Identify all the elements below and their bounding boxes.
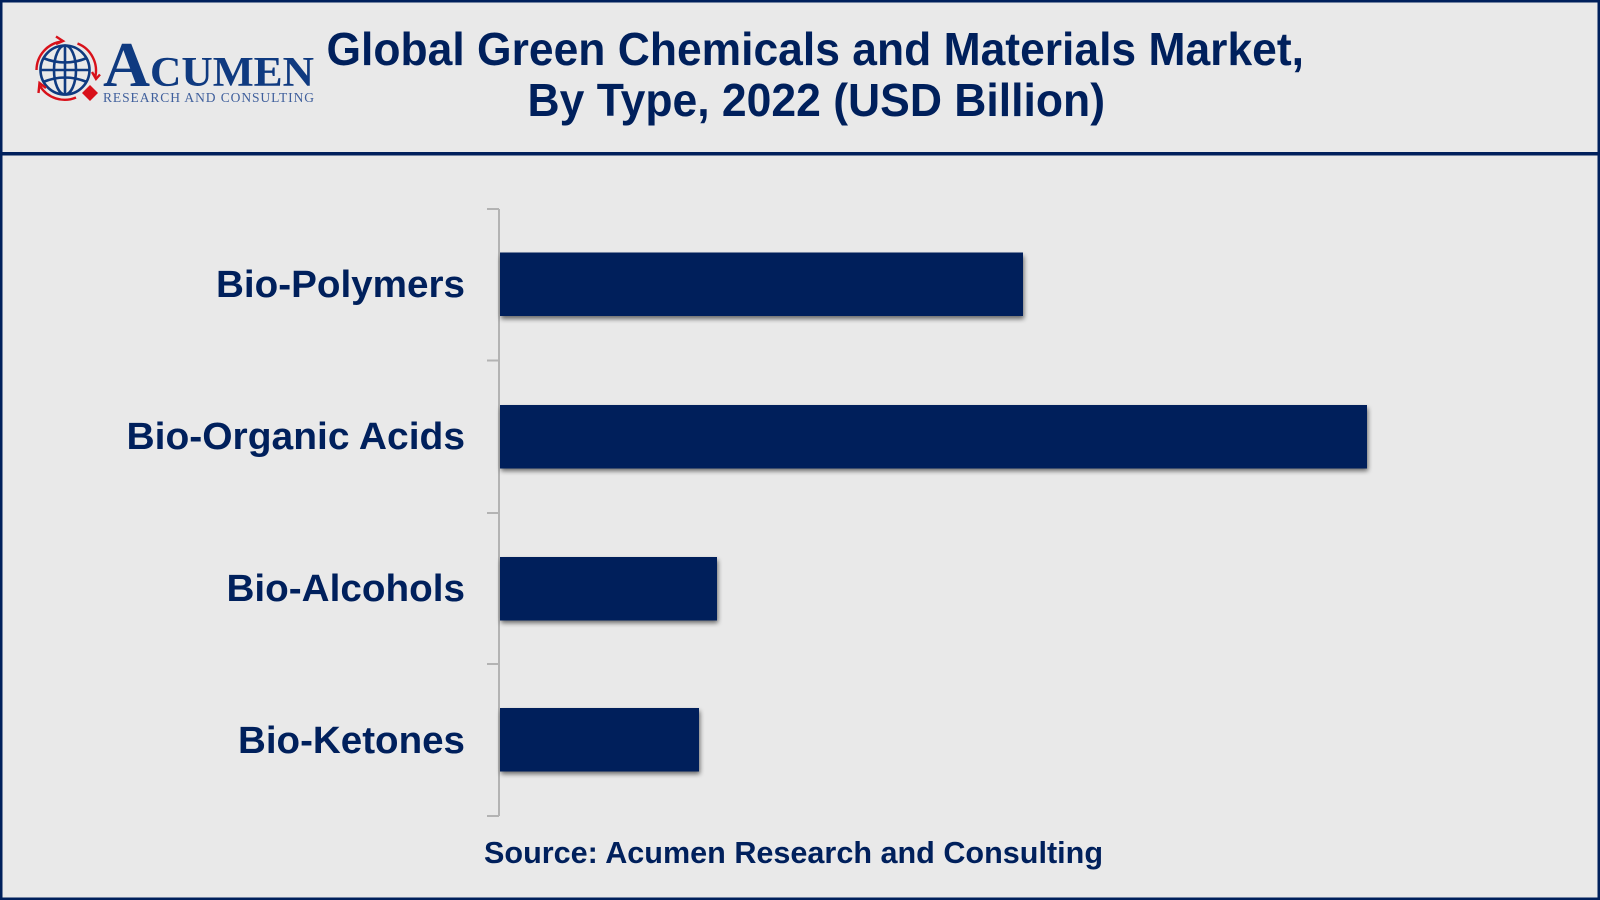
source: Source: Acumen Research and Consulting xyxy=(484,835,1103,870)
wordmark: ACUMEN xyxy=(103,30,314,100)
bar: Bio-Alcohols: Bio-Alcohols xyxy=(226,568,465,610)
bar: Bio-Polymers xyxy=(216,252,1024,319)
bar: Bio-Ketones: Bio-Ketones xyxy=(238,720,465,762)
bar: Bio-Alcohols xyxy=(226,557,718,623)
header divider xyxy=(0,152,1600,156)
title: Global Green Chemicals and Materials Market, xyxy=(326,23,1304,75)
icon: globe xyxy=(36,36,100,101)
bar chart xyxy=(126,209,1368,816)
bar: Bio-Organic Acids xyxy=(126,405,1368,471)
bar: Bio-Ketones xyxy=(238,708,700,774)
bar: Bio-Organic Acids: Bio-Organic Acids xyxy=(126,416,465,458)
axis xyxy=(487,209,499,816)
tagline: RESEARCH AND CONSULTING xyxy=(103,90,314,105)
bar: Bio-Polymers: Bio-Polymers xyxy=(216,264,465,306)
title xyxy=(326,23,1304,126)
title: By Type, 2022 (USD Billion) xyxy=(528,74,1105,126)
logo xyxy=(36,30,314,105)
